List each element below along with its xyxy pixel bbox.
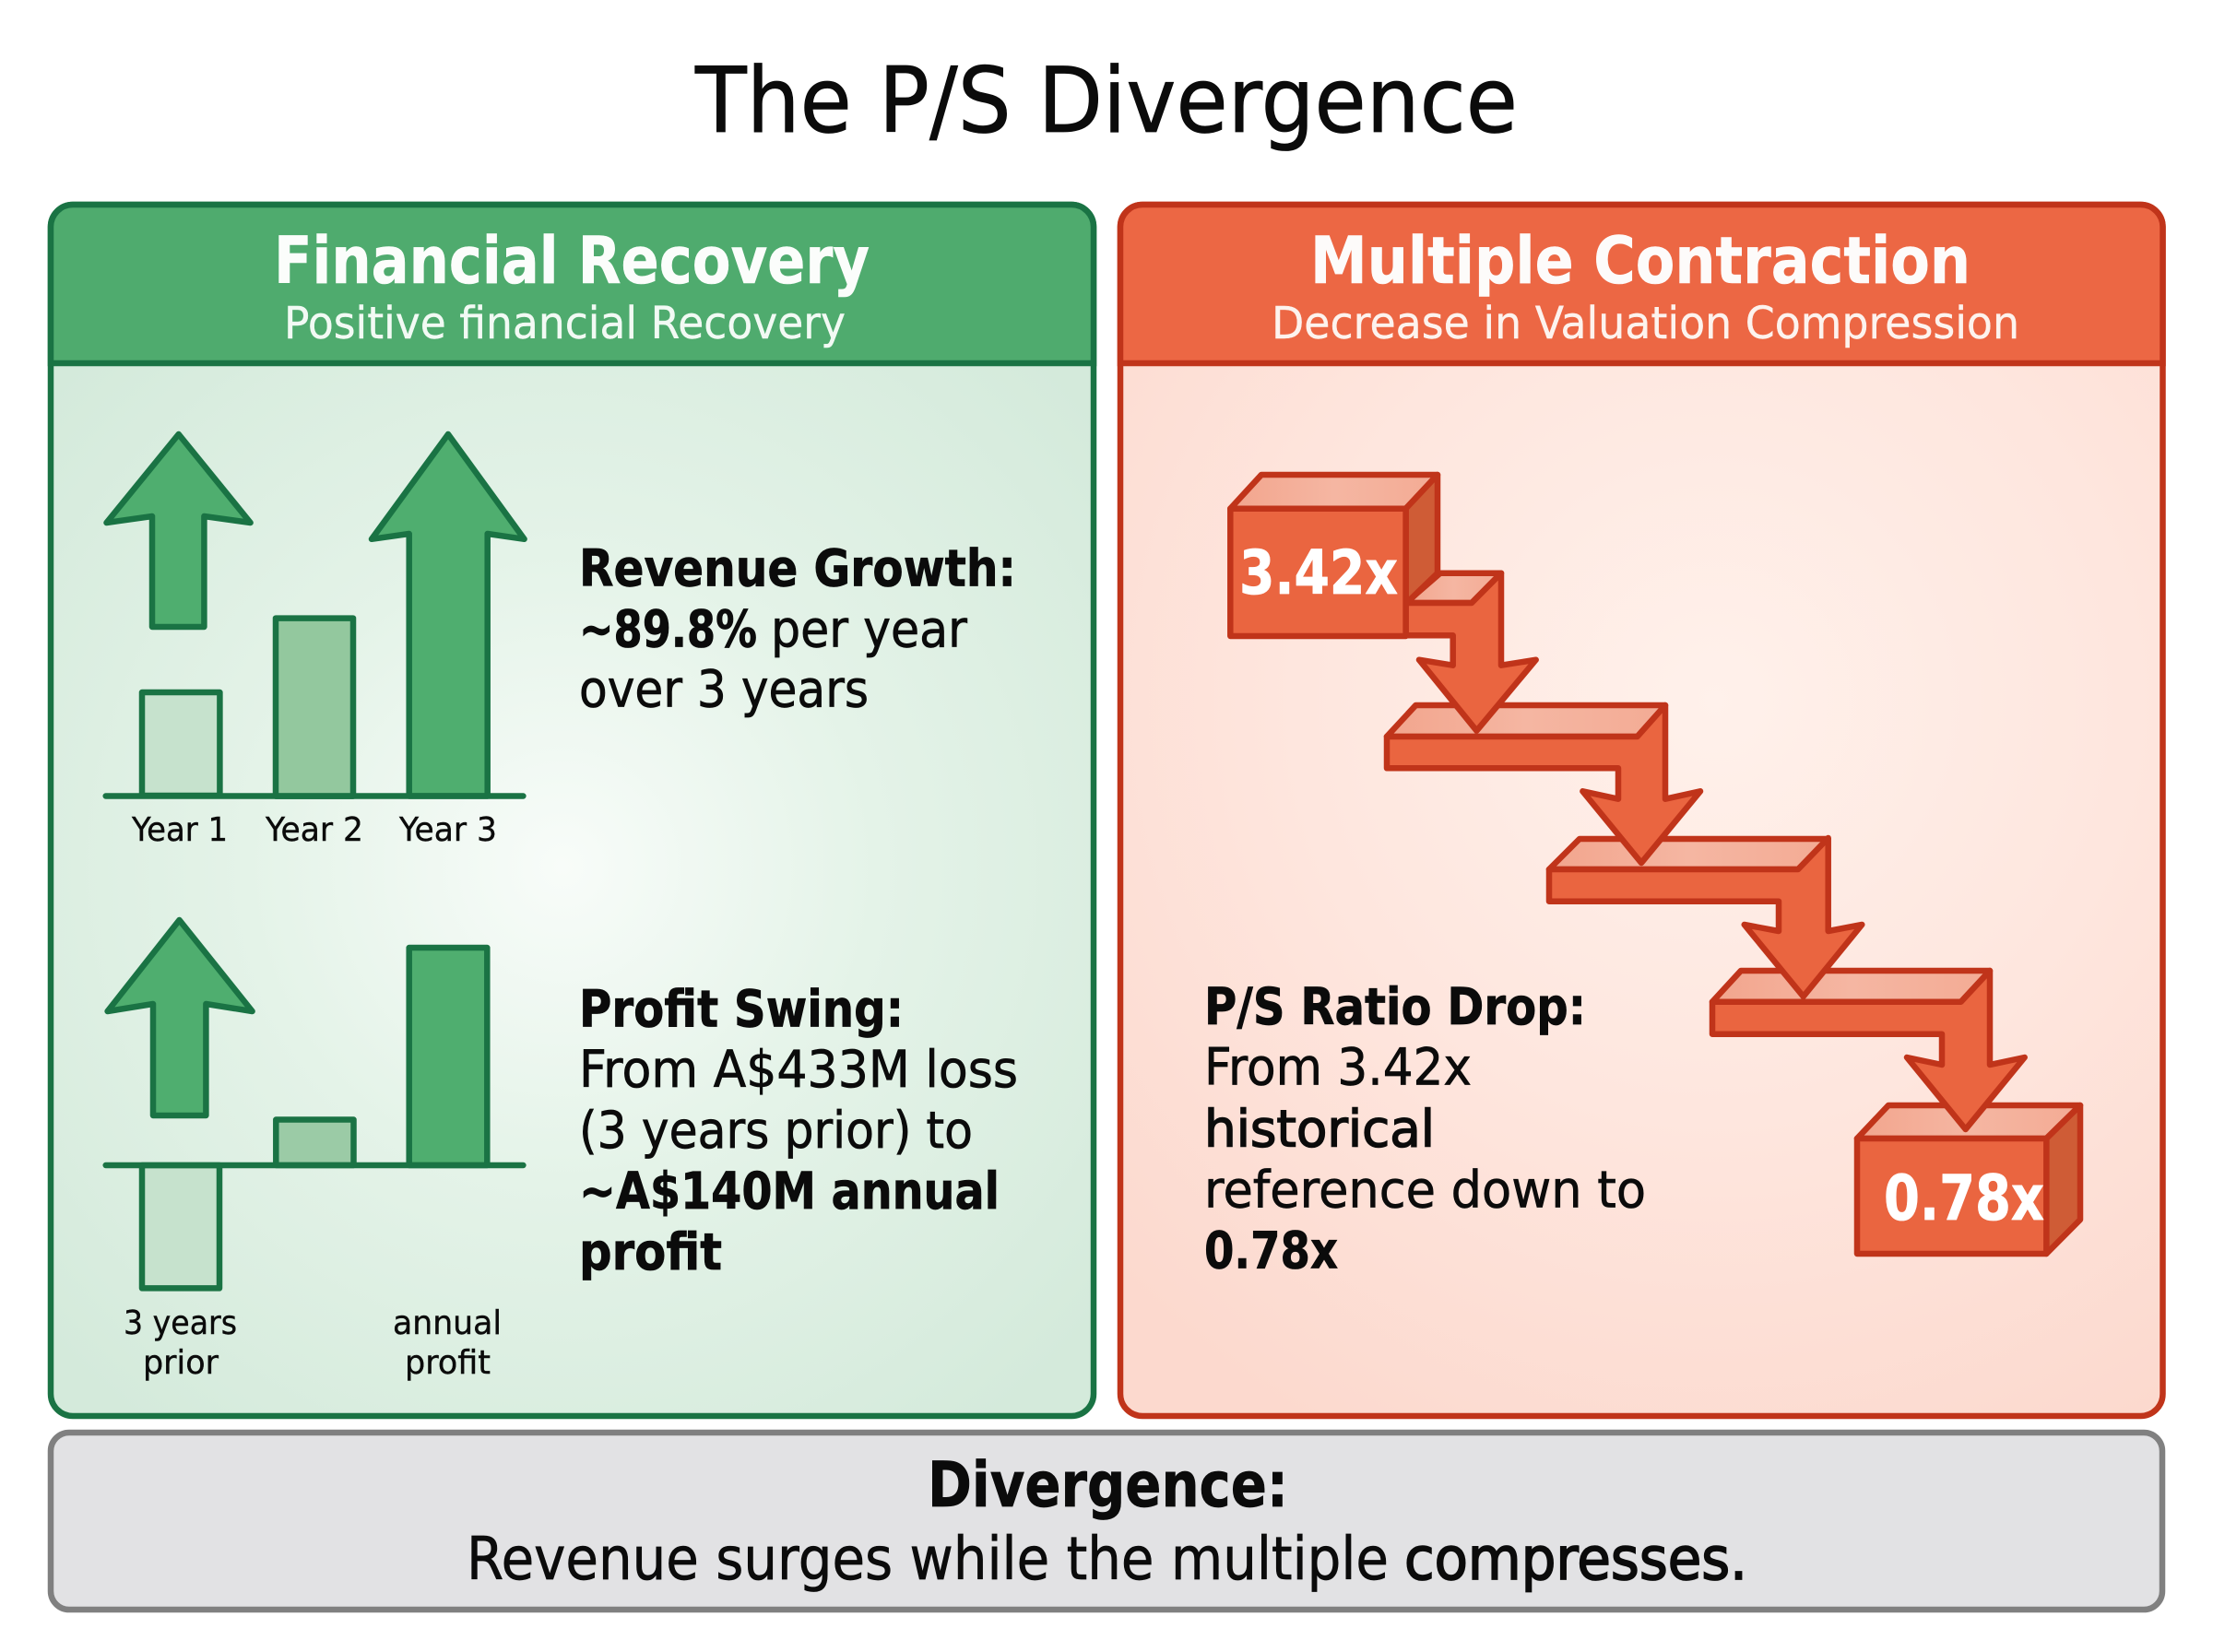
bar: annual profit [409, 948, 487, 1165]
text: revenue growth: over 3 years [579, 660, 869, 719]
text: p/s ratio drop [1204, 977, 1646, 1280]
box: 3.42x: 3.42x [1239, 537, 1398, 608]
text: profit swing: profit [579, 1222, 722, 1281]
text: p/s ratio drop: historical [1204, 1099, 1435, 1158]
text: revenue growth: Revenue Growth: [579, 538, 1016, 597]
icon: up arrow small [107, 434, 251, 627]
box: 3.42x [1230, 475, 1438, 636]
labels: profit chart: annual [393, 1304, 502, 1342]
step 2 with arrow [1387, 705, 1700, 863]
panel header: financial recovery: Positive financial Recovery [284, 298, 846, 349]
text: profit swing: From A$433M loss [579, 1040, 1018, 1099]
step 3 with arrow [1549, 838, 1862, 997]
panel header: multiple contraction: Decrease in Valuation Compression [1272, 298, 2019, 349]
bar with arrow: year 3 [372, 434, 525, 796]
text: profit swing [579, 979, 1018, 1281]
labels: profit chart [124, 1304, 502, 1382]
panel: multiple contraction [1120, 205, 2163, 1416]
labels: profit chart: prior [143, 1344, 219, 1382]
box: 0.78x [1857, 1105, 2080, 1254]
text: profit swing: Profit Swing: [579, 979, 904, 1038]
text: profit swing: ~A$140M annual [579, 1162, 1000, 1221]
panel header: financial recovery: Financial Recovery [274, 223, 870, 299]
bar: middle small [276, 1119, 354, 1165]
labels: years: Year 3 [398, 811, 497, 849]
labels: profit chart: 3 years [124, 1304, 237, 1342]
chart: profit swing bars and arrow [106, 920, 523, 1288]
icon: up arrow [108, 920, 253, 1115]
bar: loss 3 years prior [142, 1165, 219, 1288]
chart: revenue growth bars and arrows [106, 434, 525, 796]
chart: staircase of falling multiple [1230, 475, 2080, 1254]
text: profit swing: (3 years prior) to [579, 1101, 973, 1160]
panel: financial recovery [51, 205, 1094, 1416]
text: revenue growth [579, 538, 1016, 719]
step 4 with arrow [1712, 971, 2025, 1129]
bar: year 2 [276, 619, 353, 796]
panel header: financial recovery [51, 205, 1094, 363]
step 1 arrow [1406, 573, 1536, 731]
text: revenue growth: ~89.8% [579, 599, 757, 658]
text: p/s ratio drop: P/S Ratio Drop: [1204, 977, 1586, 1036]
labels: years: Year 1 [131, 811, 228, 849]
labels: years: Year 2 [265, 811, 363, 849]
box: 0.78x: 0.78x [1884, 1162, 2044, 1235]
text: p/s ratio drop: reference down to [1204, 1160, 1646, 1219]
labels: profit chart: profit [405, 1344, 491, 1382]
title: The P/S Divergence [694, 49, 1518, 154]
bar: year 1 [142, 692, 219, 796]
banner: divergence summary: compresses. [1404, 1526, 1747, 1594]
banner: divergence summary: Revenue surges while the multiple [467, 1526, 1389, 1594]
panel header: multiple contraction [1120, 205, 2163, 363]
text: p/s ratio drop: 0.78x [1204, 1221, 1338, 1280]
text: p/s ratio drop: From 3.42x [1204, 1038, 1472, 1097]
panel header: multiple contraction: Multiple Contraction [1310, 223, 1970, 299]
labels: years [131, 811, 497, 849]
banner: divergence summary [51, 1433, 2162, 1610]
text: revenue growth: per year [771, 599, 967, 658]
banner: divergence summary: Divergence: [928, 1449, 1288, 1522]
